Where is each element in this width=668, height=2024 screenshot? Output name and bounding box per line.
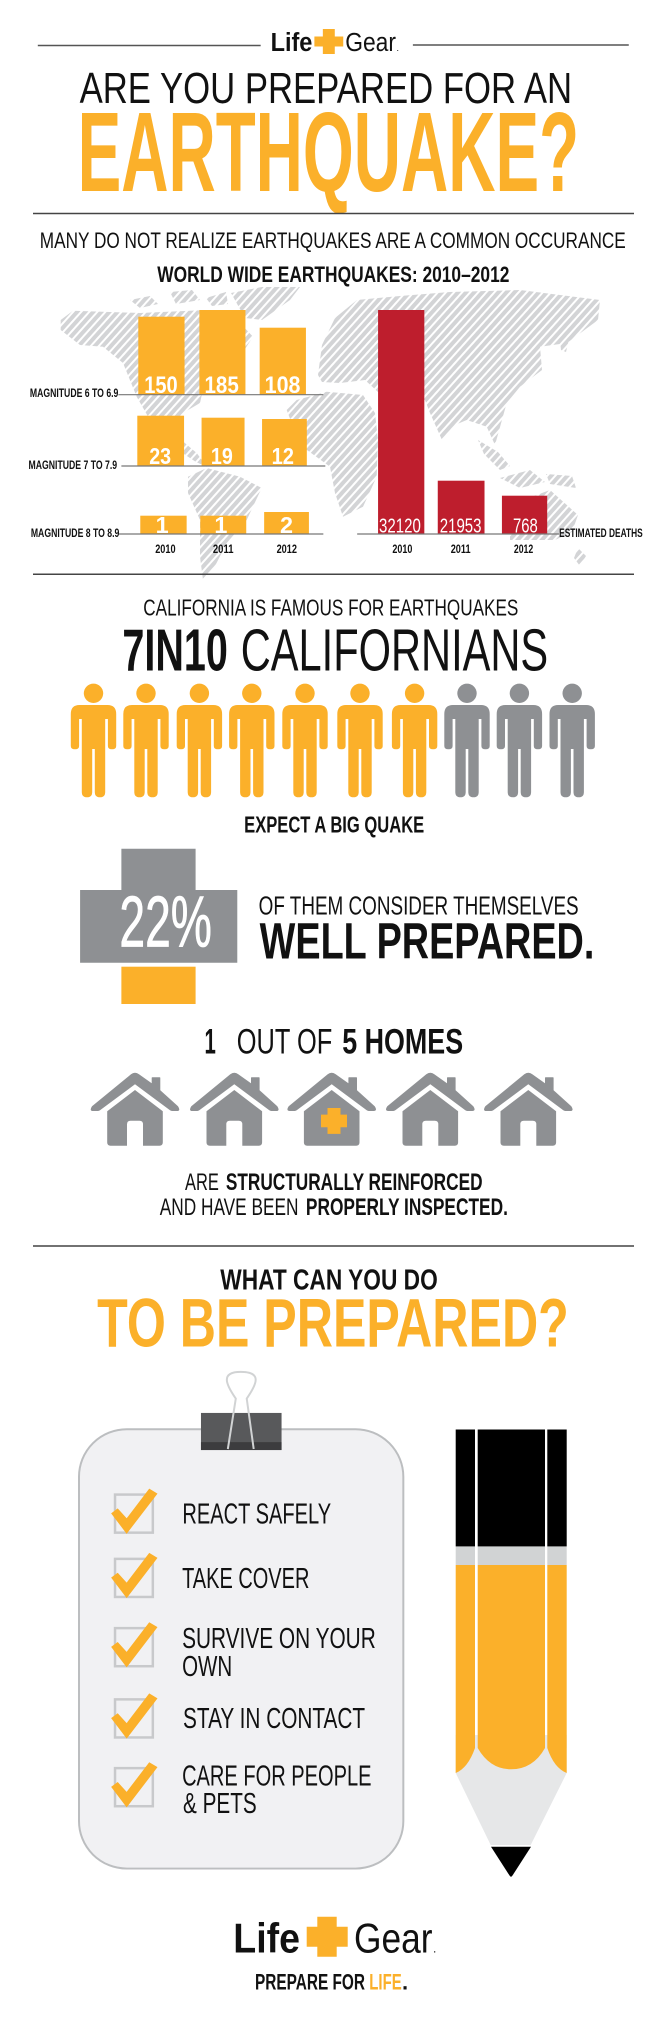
bar chart: estimated deaths: 2010 [392,544,412,556]
bar chart: estimated deaths: 2012 [514,544,533,556]
checklist item: take cover [111,1553,309,1598]
bar chart: magnitude 8 to 8.9 [31,512,323,540]
bar chart: magnitude 7 to 7.9: 19 [211,443,233,469]
clipboard checklist [79,1372,403,1869]
7 in 10 statistic: 7IN10 [122,619,228,684]
checklist item: react safely: REACT SAFELY [182,1498,331,1530]
heading: what can you do: WHAT CAN YOU DO [220,1264,438,1296]
house icons [91,1073,573,1146]
checklist item: survive on your own: SURVIVE ON YOUR [182,1623,376,1655]
footer logo: . [433,1941,436,1955]
checklist item: care for people and pets [111,1761,371,1820]
chart title: WORLD WIDE EARTHQUAKES: 2010–2012 [157,262,509,287]
bar chart: estimated deaths: 768 [513,515,538,538]
bar chart: magnitude 7 to 7.9: 23 [149,443,171,469]
bar chart: estimated deaths: 21953 [440,515,482,538]
checklist item: stay in contact: STAY IN CONTACT [183,1703,365,1735]
california heading: CALIFORNIA IS FAMOUS FOR EARTHQUAKES [143,595,518,621]
bar chart: magnitude 8 to 8.9: 1 [214,512,227,538]
bar chart: magnitude 6 to 6.9: 150 [144,372,178,399]
bar chart: magnitude 8 to 8.9: 1 [156,512,169,538]
bar chart: magnitude 6 to 6.9: 185 [204,372,239,399]
cross graphic: 22 percent: 22% [119,883,212,963]
7 in 10 statistic [122,619,548,684]
bar chart: estimated deaths: 2011 [451,544,471,556]
bar chart: magnitude 8 to 8.9: MAGNITUDE 8 TO 8.9 [31,528,119,540]
header logo: Gear [345,29,396,57]
header logo: . [396,43,399,53]
bar chart: estimated deaths [357,310,643,556]
heading: 1 out of 5 homes: 1 [205,1022,216,1061]
bar chart: magnitude 7 to 7.9: 12 [272,443,294,469]
caption: structurally reinforced [160,1169,508,1221]
caption: structurally reinforced: ARE [185,1169,219,1196]
checklist item: stay in contact [111,1693,365,1739]
bar chart: magnitude 7 to 7.9 [29,416,325,472]
year labels: magnitude chart [155,544,297,556]
tagline: PREPARE FOR [255,1969,365,1994]
7 in 10 statistic: CALIFORNIANS [241,619,548,684]
bar chart: magnitude 6 to 6.9 [30,310,323,400]
tagline: . [402,1969,408,1994]
checklist item: care for people and pets: & PETS [183,1788,257,1820]
cross graphic: 22 percent [80,849,237,1004]
header logo [38,29,629,57]
caption: structurally reinforced: AND HAVE BEEN [160,1194,298,1221]
bar chart: magnitude 6 to 6.9: MAGNITUDE 6 TO 6.9 [30,388,118,400]
footer logo: Gear [354,1914,433,1961]
world map background [61,287,600,580]
bar chart: estimated deaths: 32120 [379,515,421,538]
checklist item: survive on your own [111,1622,376,1683]
heading: 1 out of 5 homes: OUT OF [237,1022,332,1061]
year labels: magnitude chart: 2011 [213,544,234,556]
checklist item: care for people and pets: CARE FOR PEOPLE [182,1761,371,1792]
checklist item: react safely [111,1489,331,1534]
heading: 1 out of 5 homes [205,1022,463,1061]
year labels: magnitude chart: 2012 [277,544,297,556]
footer logo [233,1914,436,1961]
tagline: LIFE [369,1969,402,1994]
header logo: Life [271,29,312,57]
caption: structurally reinforced: PROPERLY INSPECTED. [306,1194,508,1221]
binder clip [201,1372,282,1450]
caption: expect a big quake: EXPECT A BIG QUAKE [244,812,424,837]
pencil illustration [456,1430,567,1877]
year labels: magnitude chart: 2010 [155,544,176,556]
bar chart: magnitude 6 to 6.9: 108 [265,372,300,399]
caption: structurally reinforced: STRUCTURALLY REINFORCED [226,1169,483,1196]
text: well prepared [259,892,594,969]
checklist item: survive on your own: OWN [182,1651,232,1683]
bar chart: magnitude 8 to 8.9: 2 [280,512,293,538]
bar chart: magnitude 7 to 7.9: MAGNITUDE 7 TO 7.9 [29,460,117,472]
heading: 1 out of 5 homes: 5 HOMES [342,1022,463,1061]
checklist item: take cover: TAKE COVER [182,1563,309,1595]
people pictogram: 7 of 10 [71,684,595,797]
footer logo: Life [233,1914,300,1961]
